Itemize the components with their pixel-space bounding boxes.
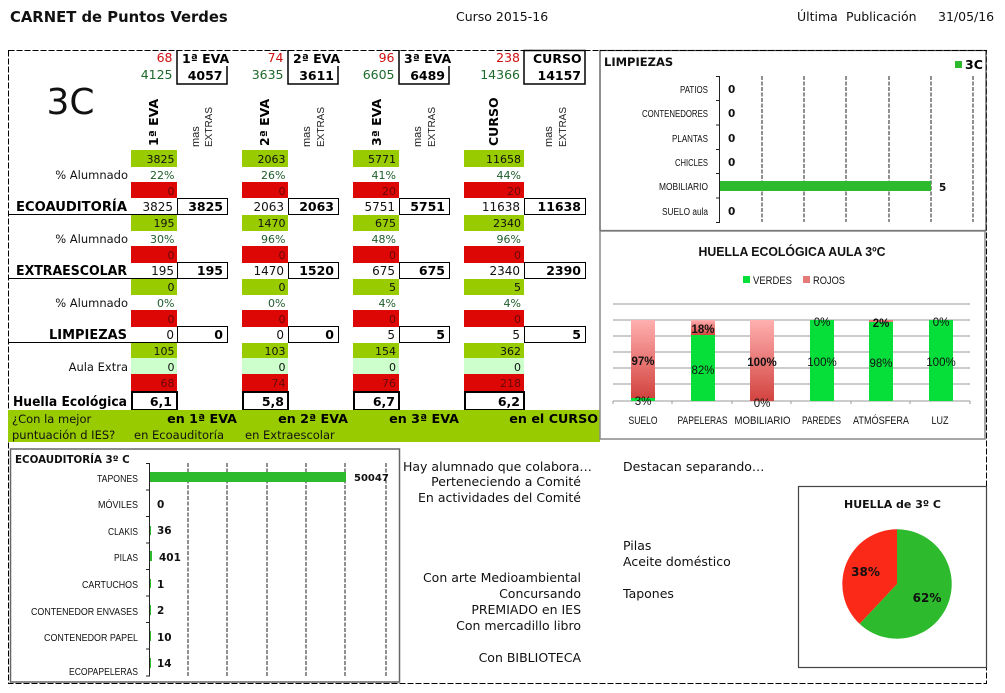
ecoauditoria labels: CARTUCHOS xyxy=(82,580,138,591)
panel: pie chart xyxy=(798,486,986,668)
huella data labels: 18% xyxy=(691,324,715,336)
section: ecoauditoria: 11638 xyxy=(482,200,520,214)
rotated column headers: EXTRAS xyxy=(204,107,215,147)
section: extraescolar: 195 xyxy=(154,217,174,230)
header totals: 238 xyxy=(496,50,520,65)
ecoauditoria labels: CONTENEDOR ENVASES xyxy=(31,607,138,618)
best score band: en 1ª EVA xyxy=(167,411,237,426)
section: limpiezas: 0 xyxy=(276,328,284,342)
section: huella ecologica: 0 xyxy=(168,361,174,374)
text block: destacan separando: Destacan separando… xyxy=(623,459,764,474)
ecoauditoria axis xyxy=(146,464,150,676)
best score band: en Ecoauditoría xyxy=(134,428,224,442)
section: huella ecologica: 154 xyxy=(375,345,396,358)
best score band xyxy=(8,410,600,442)
section: extraescolar: 675 xyxy=(375,217,396,230)
section: ecoauditoria: 11638 xyxy=(538,199,581,214)
huella legend: ROJOS xyxy=(813,275,845,287)
header totals: 2ª EVA xyxy=(293,51,340,66)
huella category labels: PAREDES xyxy=(802,415,841,427)
section: ecoauditoria: % Alumnado xyxy=(55,168,128,182)
header totals: 14157 xyxy=(538,68,581,83)
section: ecoauditoria: 2063 xyxy=(299,199,334,214)
ecoauditoria values: 36 xyxy=(157,525,172,537)
limpiezas labels: SUELO aula xyxy=(662,207,708,218)
section: extraescolar: 0 xyxy=(168,249,174,262)
limpiezas heading: LIMPIEZAS xyxy=(604,55,673,69)
section: ecoauditoria: ECOAUDITORÍA xyxy=(16,199,127,215)
section: huella ecologica: 5,8 xyxy=(262,394,284,409)
rotated column headers: mas xyxy=(301,126,313,147)
ecoauditoria labels: CONTENEDOR PAPEL xyxy=(44,633,138,644)
huella data labels: 0% xyxy=(814,317,830,329)
section: limpiezas: % Alumnado xyxy=(55,296,128,310)
header totals: 68 xyxy=(157,50,173,65)
section: huella ecologica: 0 xyxy=(514,361,521,374)
section: huella ecologica: Aula Extra xyxy=(69,360,128,374)
section: extraescolar: 96% xyxy=(497,233,521,246)
section: limpiezas: 0 xyxy=(325,327,334,342)
ecoauditoria values: 14 xyxy=(157,658,172,670)
section: extraescolar: 195 xyxy=(151,264,174,278)
panel: huella ecologica aula chart xyxy=(600,231,985,439)
ecoauditoria values: 10 xyxy=(157,632,172,644)
rotated column headers: CURSO xyxy=(486,97,501,146)
huella data labels: 2% xyxy=(873,318,889,330)
pie heading: HUELLA de 3º C xyxy=(844,498,941,511)
section: extraescolar: 0 xyxy=(278,249,286,262)
section: huella ecologica: 74 xyxy=(272,377,286,390)
section: huella ecologica: 76 xyxy=(382,377,396,390)
huella category labels: LUZ xyxy=(932,415,949,427)
section: huella ecologica: 362 xyxy=(500,345,521,358)
section: huella ecologica: 105 xyxy=(154,345,174,358)
huella data labels: 82% xyxy=(691,365,715,377)
ecoauditoria labels: PILAS xyxy=(114,553,138,564)
rotated column headers: EXTRAS xyxy=(427,107,438,147)
section: huella ecologica: 68 xyxy=(160,377,174,390)
text block: actividades: Con BIBLIOTECA xyxy=(479,650,581,665)
section: huella ecologica xyxy=(13,343,524,410)
section: ecoauditoria: 26% xyxy=(261,169,286,182)
limpiezas labels xyxy=(642,85,708,218)
best score band: en Extraescolar xyxy=(245,428,335,442)
publication date: Última xyxy=(797,9,838,24)
text block: actividades: Con mercadillo libro xyxy=(456,618,581,633)
header totals: 3611 xyxy=(299,68,334,83)
section: limpiezas: 0 xyxy=(278,281,286,294)
section: limpiezas: 5 xyxy=(572,327,581,342)
section: limpiezas: 0 xyxy=(166,328,174,342)
bar: paredes xyxy=(810,320,834,401)
ecoauditoria gridlines xyxy=(188,463,386,676)
section: limpiezas: 0% xyxy=(268,297,286,310)
limpiezas values: 0 xyxy=(728,133,735,145)
bar: papeleras xyxy=(691,320,715,401)
pie labels xyxy=(851,565,941,605)
section: limpiezas: 0 xyxy=(514,313,521,326)
section: limpiezas: 0 xyxy=(168,313,174,326)
huella category labels: MOBILIARIO xyxy=(734,415,791,427)
pie slices xyxy=(842,529,952,639)
limpiezas values: 5 xyxy=(939,182,946,194)
section: extraescolar: % Alumnado xyxy=(55,232,128,246)
text block: alumnado colabora: Perteneciendo a Comité xyxy=(431,474,581,489)
huella data labels: 0% xyxy=(933,317,949,329)
best score band: en 2ª EVA xyxy=(278,411,348,426)
best score band: en el CURSO xyxy=(509,411,598,426)
pie labels: 62% xyxy=(913,591,941,605)
ecoauditoria values: 1 xyxy=(157,579,164,591)
ecoauditoria labels: ECOPAPELERAS xyxy=(69,667,138,678)
section: huella ecologica: 6,7 xyxy=(373,394,395,409)
section: extraescolar: 675 xyxy=(372,264,395,278)
section: ecoauditoria: 5751 xyxy=(364,200,395,214)
section: extraescolar: 0 xyxy=(514,249,521,262)
text block: destacan separando: Aceite doméstico xyxy=(623,554,731,569)
section: extraescolar: 1520 xyxy=(299,263,334,278)
header totals: 6489 xyxy=(410,68,445,83)
section: ecoauditoria: 3825 xyxy=(188,199,223,214)
bar: atmosfera xyxy=(869,320,893,401)
section: ecoauditoria: 20 xyxy=(382,185,396,198)
limpiezas gridlines xyxy=(762,76,973,222)
header totals: 74 xyxy=(268,50,284,65)
limpiezas values: 0 xyxy=(728,206,735,218)
bar: mobiliario xyxy=(750,320,774,401)
text block: actividades xyxy=(423,570,581,665)
rotated column headers: mas xyxy=(412,126,424,147)
limpiezas labels: CHICLES xyxy=(675,158,708,169)
rotated column headers: EXTRAS xyxy=(316,107,327,147)
section: ecoauditoria: 5771 xyxy=(368,153,396,166)
section: ecoauditoria: 2063 xyxy=(253,200,284,214)
rotated column headers: 1ª EVA xyxy=(146,99,161,146)
section: huella ecologica: 103 xyxy=(264,345,286,358)
header totals xyxy=(141,50,585,84)
text block: destacan separando: Tapones xyxy=(622,586,674,601)
rotated column headers: 3ª EVA xyxy=(369,99,384,146)
rotated column headers: EXTRAS xyxy=(558,107,569,147)
section: ecoauditoria: 22% xyxy=(150,169,174,182)
header totals: 4057 xyxy=(188,68,222,83)
title: CARNET de Puntos Verdes xyxy=(10,9,228,26)
header totals: 14366 xyxy=(480,67,520,82)
huella data labels: 97% xyxy=(631,356,655,368)
header totals: 1ª EVA xyxy=(182,51,229,66)
bar: luz xyxy=(929,320,953,401)
best score band: en 3ª EVA xyxy=(389,411,459,426)
limpiezas values: 0 xyxy=(728,157,735,169)
text block: destacan separando: Pilas xyxy=(623,538,651,553)
limpiezas legend: 3C xyxy=(965,57,983,72)
section: huella ecologica: 0 xyxy=(389,361,396,374)
header totals: 3ª EVA xyxy=(404,51,451,66)
section: limpiezas: 5 xyxy=(514,281,521,294)
huella data labels xyxy=(631,317,956,410)
limpiezas labels: MOBILIARIO xyxy=(659,182,708,193)
text block: actividades: Concursando xyxy=(499,586,581,601)
section: limpiezas: 0 xyxy=(389,313,396,326)
section: extraescolar: 2340 xyxy=(489,264,520,278)
huella data labels: 3% xyxy=(635,396,651,408)
ecoauditoria labels: TAPONES xyxy=(97,474,138,485)
header totals: 6605 xyxy=(363,67,394,82)
huella category labels: SUELO xyxy=(628,415,658,427)
section: limpiezas: 0 xyxy=(278,313,286,326)
huella legend xyxy=(743,275,845,287)
section: ecoauditoria: 11658 xyxy=(486,153,521,166)
limpiezas labels: PLANTAS xyxy=(672,134,708,145)
huella data labels: 100% xyxy=(747,357,777,369)
header totals: 4125 xyxy=(141,67,172,82)
text block: destacan separando xyxy=(622,459,764,601)
huella data labels: 100% xyxy=(926,357,956,369)
section: limpiezas: 0 xyxy=(214,327,223,342)
ecoauditoria values: 2 xyxy=(157,605,164,617)
rotated column headers: 2ª EVA xyxy=(257,99,272,146)
best score band: ¿Con la mejor xyxy=(12,412,92,426)
limpiezas values: 0 xyxy=(728,108,735,120)
text block: actividades: PREMIADO en IES xyxy=(471,602,581,617)
huella chart heading: HUELLA ECOLÓGICA AULA 3ºC xyxy=(698,244,886,259)
ecoauditoria heading: ECOAUDITORÍA 3º C xyxy=(15,453,130,466)
section: ecoauditoria: 2063 xyxy=(258,153,286,166)
panel: limpiezas chart xyxy=(600,50,987,230)
huella data labels: 98% xyxy=(869,358,893,370)
section: limpiezas: 0% xyxy=(157,297,174,310)
ecoauditoria labels: CLAKIS xyxy=(108,527,138,538)
section: huella ecologica: 218 xyxy=(500,377,521,390)
huella legend: VERDES xyxy=(753,275,792,287)
section: ecoauditoria: 5751 xyxy=(410,199,445,214)
section: limpiezas: 0 xyxy=(168,281,174,294)
section: ecoauditoria: 3825 xyxy=(146,153,174,166)
bar: suelo xyxy=(631,320,655,401)
section: extraescolar: 0 xyxy=(389,249,396,262)
huella gridlines xyxy=(613,304,970,384)
section: ecoauditoria: 0 xyxy=(278,185,286,198)
publication date xyxy=(797,9,994,24)
section: huella ecologica: 6,1 xyxy=(150,394,172,409)
section: huella ecologica: Huella Ecológica xyxy=(13,395,127,410)
huella baseline xyxy=(613,401,970,404)
section: extraescolar xyxy=(8,215,586,279)
section: extraescolar: 48% xyxy=(372,233,396,246)
section: ecoauditoria: 3825 xyxy=(142,200,173,214)
rotated column headers xyxy=(146,97,569,147)
ecoauditoria bars xyxy=(150,472,346,668)
publication date: Publicación xyxy=(846,9,917,24)
header totals: 96 xyxy=(379,50,395,65)
section: limpiezas: 5 xyxy=(436,327,445,342)
section: limpiezas: 5 xyxy=(389,281,396,294)
text block: alumnado colabora: En actividades del Comité xyxy=(418,490,581,505)
section: ecoauditoria: 0 xyxy=(168,185,174,198)
rotated column headers: mas xyxy=(190,126,202,147)
section: limpiezas: 4% xyxy=(379,297,396,310)
section: limpiezas: LIMPIEZAS xyxy=(49,328,127,343)
section: extraescolar: 2340 xyxy=(493,217,521,230)
ecoauditoria values: 50047 xyxy=(354,473,389,484)
limpiezas axis xyxy=(716,76,720,222)
section: extraescolar: 2390 xyxy=(546,263,581,278)
ecoauditoria labels: MÓVILES xyxy=(98,498,138,511)
text block: actividades: Con arte Medioambiental xyxy=(423,570,581,585)
section: ecoauditoria: 44% xyxy=(497,169,521,182)
section: extraescolar: 30% xyxy=(150,233,174,246)
section: huella ecologica: 6,2 xyxy=(498,394,520,409)
publication date: 31/05/16 xyxy=(938,9,994,24)
limpiezas labels: CONTENEDORES xyxy=(642,109,708,120)
section: limpiezas: 5 xyxy=(512,328,520,342)
ecoauditoria values: 0 xyxy=(157,499,164,511)
section: limpiezas: 4% xyxy=(504,297,521,310)
section: ecoauditoria: 20 xyxy=(507,185,521,198)
ecoauditoria values: 401 xyxy=(159,552,181,564)
panel: scoreboard xyxy=(8,50,600,442)
section: extraescolar: 675 xyxy=(419,263,445,278)
best score band: puntuación d IES? xyxy=(12,428,115,442)
rotated column headers: mas xyxy=(543,126,555,147)
section: extraescolar: 195 xyxy=(197,263,223,278)
header totals: 3635 xyxy=(252,67,284,82)
huella data labels: 100% xyxy=(807,357,837,369)
header totals: CURSO xyxy=(533,51,582,66)
text block: alumnado colabora xyxy=(403,459,592,505)
class name: 3C xyxy=(46,82,95,123)
section: ecoauditoria xyxy=(8,150,586,215)
panel: ecoauditoria chart xyxy=(10,449,400,682)
limpiezas labels: PATIOS xyxy=(680,85,708,96)
section: ecoauditoria: 41% xyxy=(372,169,396,182)
huella data labels: 0% xyxy=(754,398,770,410)
text block: alumnado colabora: Hay alumnado que colabora… xyxy=(403,459,592,474)
huella category labels xyxy=(628,414,949,427)
section: extraescolar: 1470 xyxy=(258,217,286,230)
section: extraescolar: EXTRAESCOLAR xyxy=(16,264,127,279)
section: huella ecologica: 0 xyxy=(278,361,286,374)
section: extraescolar: 1470 xyxy=(253,264,284,278)
section: extraescolar: 96% xyxy=(261,233,286,246)
ecoauditoria labels xyxy=(31,474,138,678)
limpiezas bar xyxy=(720,181,931,191)
ecoauditoria values xyxy=(157,473,389,670)
huella category labels: PAPELERAS xyxy=(678,415,728,427)
section: limpiezas: 5 xyxy=(387,328,395,342)
huella category labels: ATMÓSFERA xyxy=(853,414,910,427)
course label: Curso 2015-16 xyxy=(456,9,548,24)
limpiezas values: 0 xyxy=(728,84,735,96)
pie labels: 38% xyxy=(851,565,880,579)
limpiezas legend xyxy=(955,57,983,72)
limpiezas values xyxy=(728,84,946,218)
section: limpiezas xyxy=(8,279,586,343)
